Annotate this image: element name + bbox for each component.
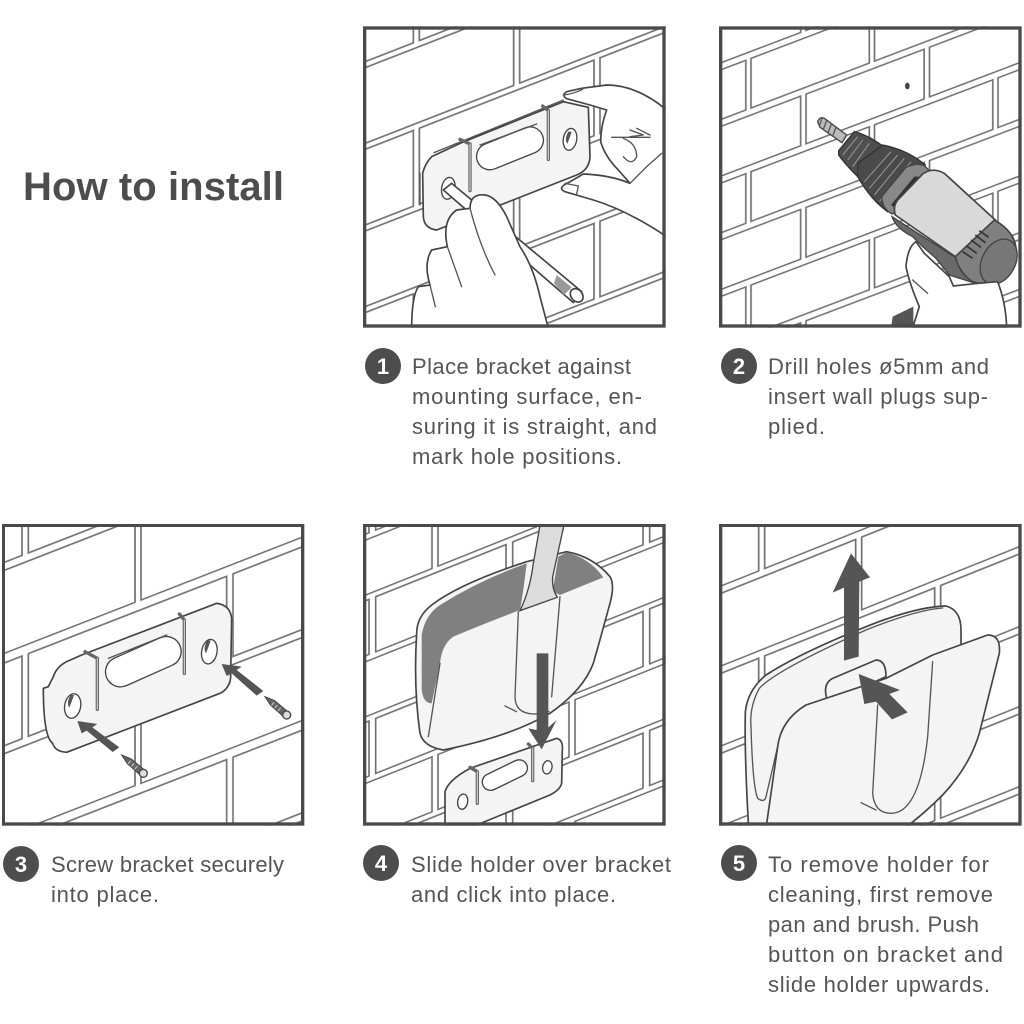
step 2 badge: [721, 348, 757, 384]
frame: [0, 520, 308, 829]
front panel of holder: [766, 635, 1000, 828]
arrow: left screw direction: [77, 721, 119, 752]
step 4 badge: [363, 845, 399, 881]
arrow: slide down: [528, 653, 557, 749]
step 5 text: pan and brush. Push: [768, 912, 979, 937]
frame: [360, 23, 669, 331]
step 1 text: [412, 354, 657, 469]
right hand: [562, 85, 667, 237]
arrow: press button: [859, 674, 908, 719]
step 3 text: into place.: [51, 882, 159, 907]
step 1 text: Place bracket against: [412, 354, 631, 379]
step 3 text: Screw bracket securely: [51, 852, 284, 877]
brick wall: [363, 26, 666, 329]
panel: step 2 illustration, drilling: [719, 26, 1022, 328]
step 2 text: plied.: [768, 414, 825, 439]
step 2 text: Drill holes ø5mm and: [768, 354, 989, 379]
step 1 text: suring it is straight, and: [412, 414, 657, 439]
step 2 text: [768, 354, 989, 439]
frame: [716, 23, 1024, 331]
hand on drill: [891, 242, 1007, 328]
step 2 text: insert wall plugs sup-: [768, 384, 988, 409]
lower bracket: [445, 738, 562, 825]
push button: [826, 660, 886, 698]
brick wall: [719, 524, 1022, 827]
left screw: [122, 755, 147, 777]
pencil: [443, 183, 586, 305]
brick wall: [363, 524, 666, 827]
brick wall: [2, 524, 305, 827]
arrow: slide up: [833, 553, 870, 661]
drill back cap: [955, 220, 1024, 291]
step 5 text: [768, 852, 1003, 997]
step 5 text: button on bracket and: [768, 942, 1003, 967]
drill grip underside: [892, 217, 973, 283]
step 1 badge: [365, 348, 401, 384]
step 3 text: [51, 852, 284, 907]
drilled hole: [905, 83, 910, 89]
step 3 badge: [3, 846, 39, 882]
step 5 badge: 5: [733, 851, 745, 876]
step 1 text: mounting surface, en-: [412, 384, 642, 409]
bracket held against wall: [420, 100, 590, 230]
step 4 text: and click into place.: [411, 882, 616, 907]
drill body: [894, 170, 995, 257]
left hand holding pencil: [412, 195, 548, 328]
pan handle: [520, 525, 564, 611]
step 1 badge: 1: [377, 354, 389, 379]
drill bit: [818, 118, 847, 143]
step 5 text: To remove holder for: [768, 852, 989, 877]
step 5 badge: [721, 845, 757, 881]
step 3 badge: 3: [15, 852, 27, 877]
step 4 badge: 4: [375, 851, 388, 876]
drill chuck: [839, 132, 933, 214]
panel: step 4 illustration, sliding holder: [363, 524, 666, 826]
panel: step 3 illustration, screwing bracket: [2, 524, 304, 826]
step 5 text: slide holder upwards.: [768, 972, 990, 997]
dustpan holder: [416, 552, 612, 750]
step 2 badge: 2: [733, 354, 745, 379]
step 5 text: cleaning, first remove: [768, 882, 993, 907]
brick wall: [719, 26, 1022, 329]
step 4 text: [411, 852, 671, 907]
back panel of holder: [745, 606, 961, 828]
arrow: right screw direction: [222, 664, 263, 696]
bracket: [43, 603, 232, 752]
right screw: [265, 697, 291, 719]
panel: step 1 illustration, marking holes: [363, 26, 666, 328]
title: How to install: [23, 165, 284, 209]
panel: step 5 illustration, removing holder: [719, 524, 1022, 826]
step 4 text: Slide holder over bracket: [411, 852, 671, 877]
frame: [360, 520, 669, 829]
step 1 text: mark hole positions.: [412, 444, 622, 469]
frame: [716, 520, 1024, 829]
